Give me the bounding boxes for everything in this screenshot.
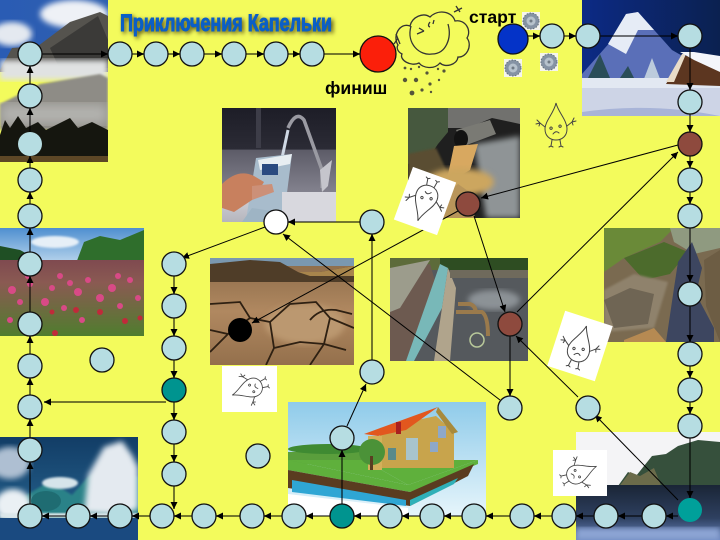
photo: winter mountains with cabin <box>582 0 720 116</box>
station: white clean water <box>264 210 288 234</box>
label: start: старт <box>469 7 517 27</box>
station: start (blue) <box>498 24 528 54</box>
photo: stream <box>604 228 720 342</box>
station: brown polluted top <box>678 132 702 156</box>
photo: water treatment plant <box>390 258 528 361</box>
icon: raindrops <box>403 66 446 95</box>
photo: ocean wave <box>0 437 138 540</box>
icon: worried drop <box>536 103 576 147</box>
station: brown pipe <box>456 192 480 216</box>
photo: flower field <box>0 228 144 336</box>
station: finish (red) <box>360 36 396 72</box>
icon: happy rain cloud <box>394 6 469 95</box>
photo: forest lake <box>576 432 720 540</box>
title: Приключения Капельки <box>120 10 332 37</box>
photo: polluted pipe <box>408 108 520 218</box>
station: brown treatment <box>498 312 522 336</box>
sticker: drop sad, rotated <box>547 311 613 381</box>
sticker: drop falling <box>222 366 277 412</box>
icon: snowflake 1 <box>522 12 540 30</box>
icon: snowflake 3 <box>540 53 558 71</box>
photo: house with groundwater <box>288 402 486 516</box>
station: teal lake <box>678 498 702 522</box>
label: finish: финиш <box>325 78 387 98</box>
station: teal house <box>330 504 354 528</box>
photo: cracked earth <box>210 258 354 365</box>
station: black drought <box>228 318 252 342</box>
station: teal field path <box>162 378 186 402</box>
sticker: drop on pipe photo <box>394 167 456 235</box>
photo: misty mountain <box>0 0 108 162</box>
thin arrows between special stations <box>182 145 678 500</box>
sticker: drop near lake <box>553 450 607 496</box>
icon: snowflake 2 <box>504 59 522 77</box>
photo: water from faucet <box>222 108 336 222</box>
